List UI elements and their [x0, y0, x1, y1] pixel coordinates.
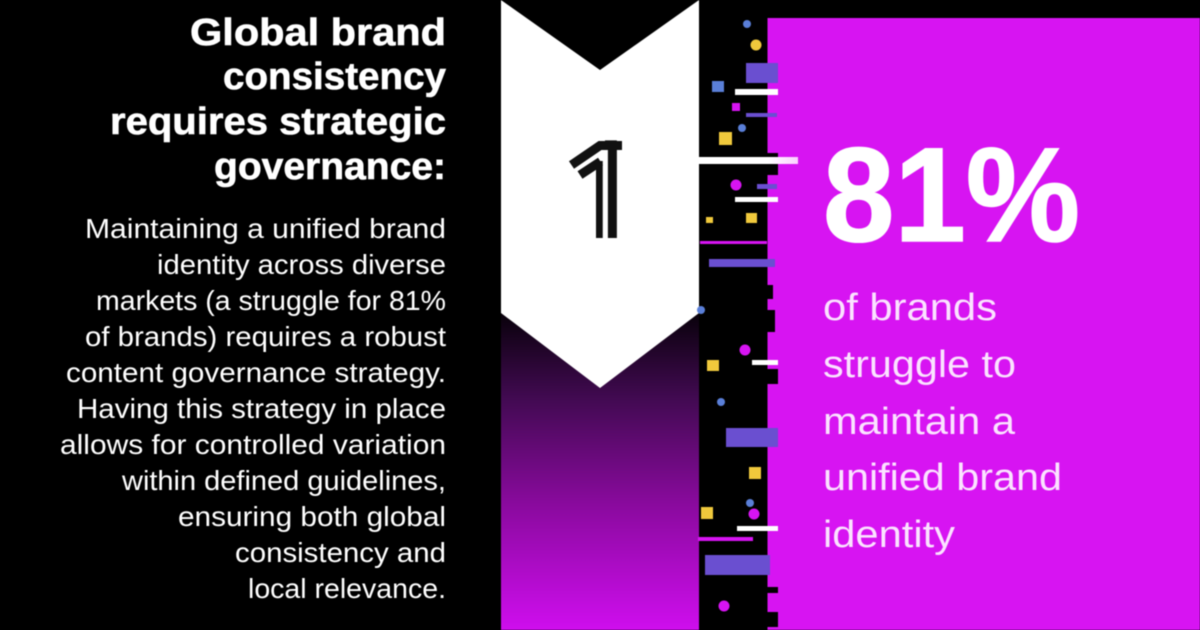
magenta marks: [698, 103, 767, 612]
body text block: within defined guidelines,: [121, 465, 446, 496]
number 1: 1: [558, 110, 647, 289]
body text block: consistency and: [235, 537, 446, 568]
heading: governance:: [214, 146, 446, 188]
number 1: [568, 140, 623, 239]
stat description: struggle to: [823, 344, 1016, 386]
blue dots: [697, 20, 754, 507]
heading: requires strategic: [110, 101, 446, 143]
heading: Global brand: [190, 12, 446, 54]
stat description: unified brand: [823, 457, 1062, 499]
yellow marks: [701, 40, 762, 519]
body text block: ensuring both global: [178, 501, 446, 532]
body text block: Maintaining a unified brand: [85, 213, 446, 244]
stat: 81%: 81%: [823, 121, 1080, 270]
white chevron shape: [501, 0, 699, 388]
body text block: Having this strategy in place: [77, 393, 446, 424]
body text block: identity across diverse: [157, 249, 446, 280]
body text block: local relevance.: [248, 573, 446, 604]
body text block: [60, 213, 446, 604]
body text block: content governance strategy.: [66, 357, 446, 388]
stat description: maintain a: [823, 401, 1016, 443]
heading: [110, 12, 446, 188]
chevron badge: [501, 0, 699, 388]
heading: consistency: [223, 56, 446, 98]
white bars: [735, 89, 778, 531]
panel: magenta stat panel: [768, 18, 1200, 630]
body text block: allows for controlled variation: [60, 429, 446, 460]
decorative confetti strip: [697, 20, 778, 612]
purple bars: [705, 63, 778, 575]
stat description: [823, 287, 1062, 556]
stepped black edge of panel: [767, 153, 778, 627]
body text block: of brands) requires a robust: [85, 321, 446, 352]
stat description: identity: [823, 514, 955, 556]
connector line from badge to stat: [698, 157, 798, 164]
panel: gradient column: [501, 300, 699, 630]
body text block: markets (a struggle for 81%: [96, 285, 446, 316]
stat description: of brands: [823, 287, 997, 329]
